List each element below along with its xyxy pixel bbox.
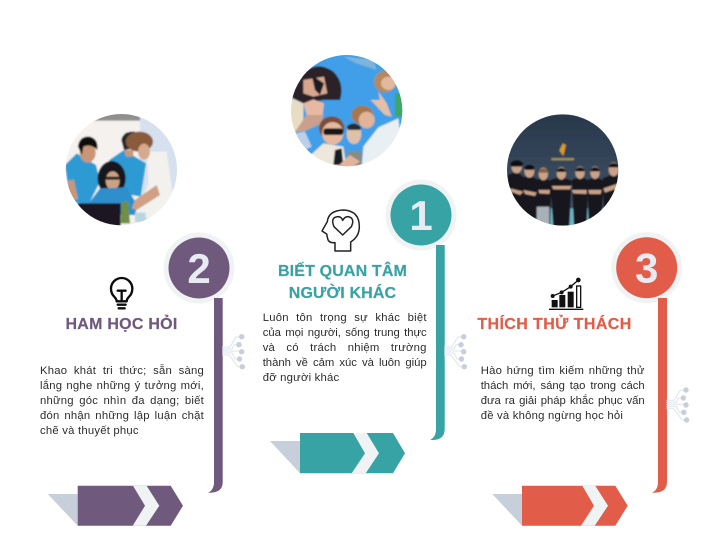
- arrow banner: [492, 486, 628, 526]
- heading: NGƯỜI KHÁC: [289, 285, 396, 302]
- vertical connector bar: [208, 298, 223, 493]
- icon: growth bar chart: [549, 278, 583, 309]
- arrow banner: [270, 433, 405, 473]
- panel: biet quan tam nguoi khac: [262, 55, 467, 474]
- text block: thành về cảm xúc và luôn giúp: [263, 357, 427, 369]
- icon: light bulb: [111, 278, 132, 308]
- text block: Luôn tôn trọng sự khác biệt: [263, 312, 427, 324]
- text block: của mọi người, sống trung thực: [263, 327, 427, 339]
- text block: những góc nhìn đa dạng; biết: [40, 395, 204, 407]
- icon: head with heart: [322, 210, 359, 251]
- text block: đón nhận những lập luận chặt: [40, 410, 204, 422]
- circuit decoration: [444, 334, 467, 369]
- number badge 2: 2: [187, 245, 211, 292]
- panel: thich thu thach: [477, 114, 690, 526]
- text block: [262, 312, 427, 384]
- number badge 3: [611, 232, 682, 303]
- number badge 3: 3: [635, 245, 658, 292]
- panel: ham hoc hoi: [40, 114, 245, 526]
- heading: BIẾT QUAN TÂM: [278, 263, 407, 280]
- text block: đề và không ngừng học hỏi: [481, 410, 623, 422]
- text block: đưa ra giải pháp khắc phục vấn: [481, 395, 645, 407]
- text block: [40, 364, 204, 437]
- text block: [480, 365, 645, 422]
- heading: HAM HỌC HỎI: [65, 316, 178, 333]
- text block: thách mới, sáng tạo trong cách: [481, 380, 645, 392]
- number badge 1: [386, 180, 456, 250]
- photo: team in black shirts: [507, 114, 618, 226]
- circuit decoration: [222, 334, 245, 369]
- photo: group selfie under sky: [291, 55, 402, 166]
- text block: đỡ người khác: [263, 372, 339, 384]
- arrow banner: [48, 486, 183, 526]
- text block: lắng nghe những ý tưởng mới,: [40, 380, 204, 392]
- circuit decoration: [666, 387, 689, 423]
- vertical connector bar: [652, 298, 667, 493]
- heading: THÍCH THỬ THÁCH: [477, 316, 632, 333]
- text block: Khao khát tri thức; sẵn sàng: [40, 365, 204, 377]
- photo: team at laptop: [66, 114, 177, 226]
- number badge 2: [164, 232, 234, 304]
- text block: Hào hứng tìm kiếm những thử: [481, 365, 645, 377]
- text block: và có trách nhiệm trường: [263, 342, 427, 354]
- heading: [278, 262, 407, 302]
- vertical connector bar: [430, 245, 445, 440]
- number badge 1: 1: [409, 192, 433, 239]
- text block: chẽ và thuyết phục: [40, 425, 139, 437]
